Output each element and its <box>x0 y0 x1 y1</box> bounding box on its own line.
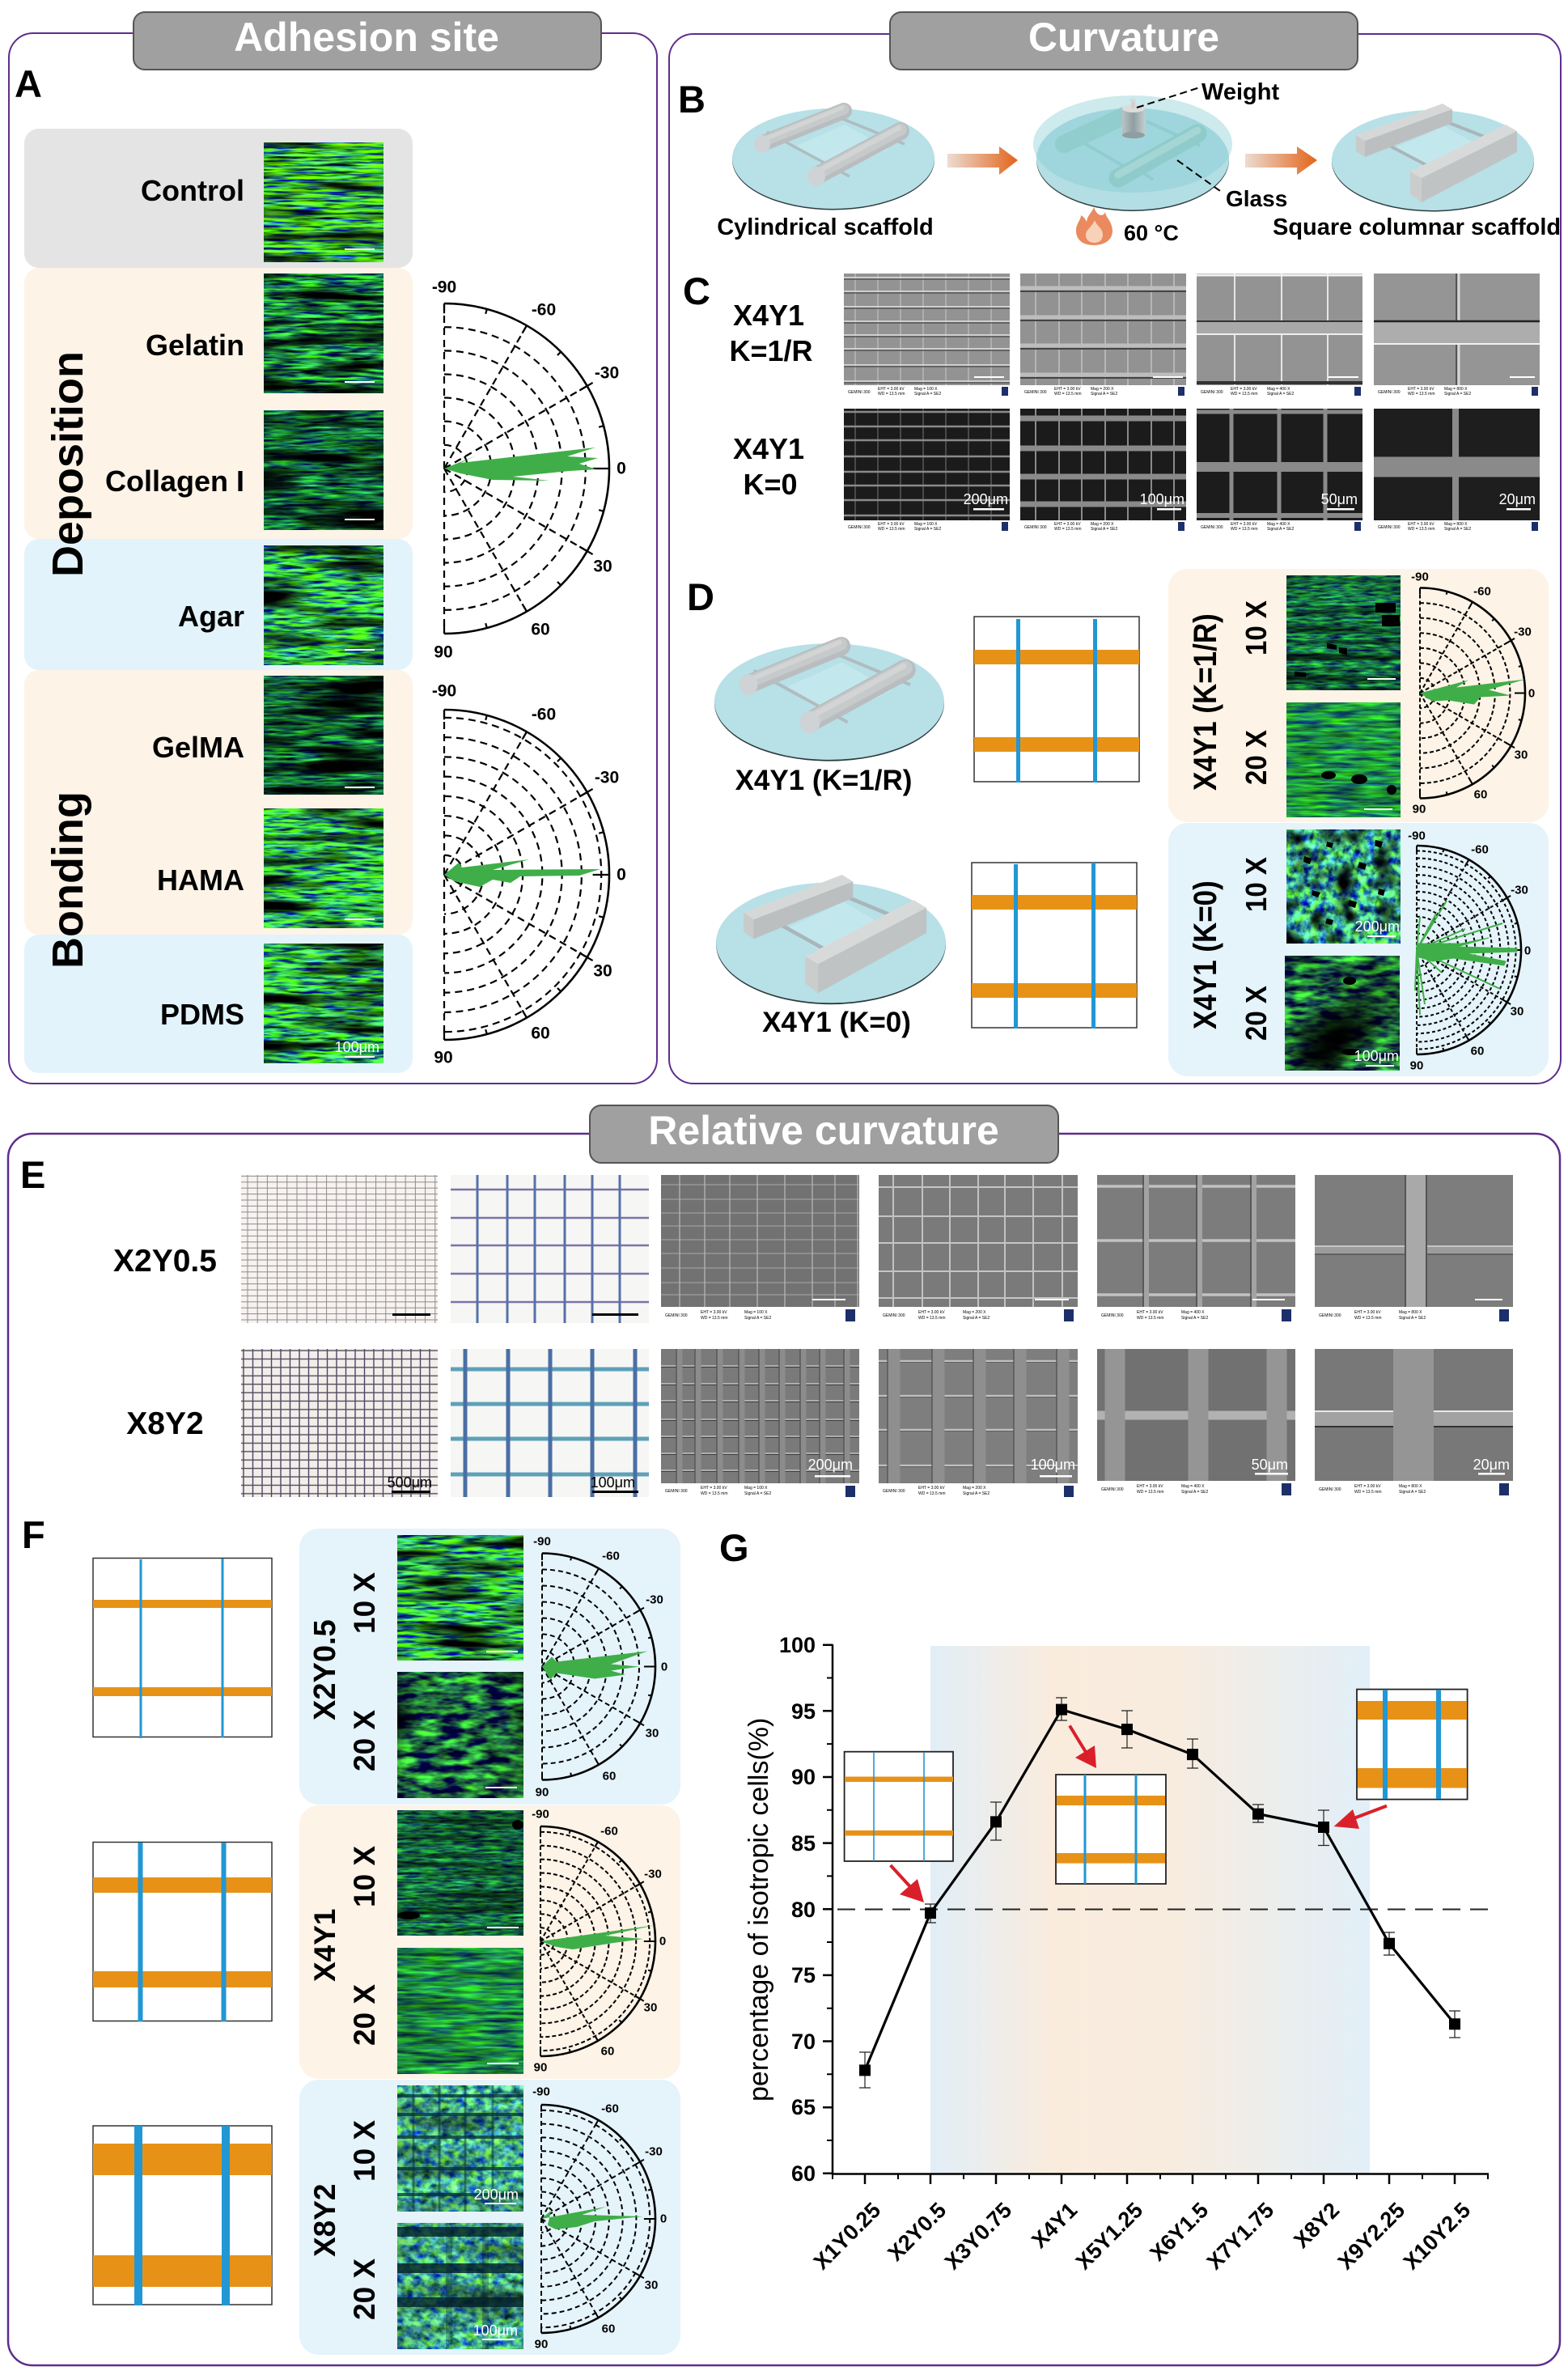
result panel: X4Y1 K=0: 90 <box>1410 1058 1423 1073</box>
result panel: X8Y2: -30 <box>645 2144 663 2159</box>
panel: adhesion site frame <box>9 33 657 1084</box>
SEM K=0 100 um: 100μm <box>1140 491 1184 507</box>
SEM X8Y2 200 um: 200μm <box>808 1457 853 1473</box>
result panel: X2Y0.5: -30 <box>646 1593 663 1607</box>
SEM X2Y0.5 50 um: GEMINI 300 <box>1101 1313 1124 1318</box>
SEM X8Y2 100 um: GEMINI 300 <box>883 1489 905 1494</box>
result panel: X4Y1 K=0: X4Y1 (K=0) <box>1187 880 1223 1029</box>
panel F: schematics and cell alignment <box>22 1513 680 2355</box>
SEM X2Y0.5 100 um <box>879 1175 1078 1323</box>
SEM X8Y2 20 um: 20μm <box>1473 1457 1510 1473</box>
highlighted range band <box>930 1646 1370 2174</box>
polar chart: deposition: -90 <box>432 278 456 296</box>
label D: D <box>687 575 714 618</box>
SEM X2Y0.5 200 um <box>661 1175 859 1323</box>
result panel: X2Y0.5: 30 <box>646 1727 659 1740</box>
result panel: X2Y0.5: 60 <box>603 1769 616 1784</box>
row label: X4Y1 K=1/R: X4Y1 <box>733 299 804 332</box>
disc: cylindrical scaffold <box>732 108 934 210</box>
x axis labels: X5Y1.25 <box>1071 2198 1147 2274</box>
SEM K=1/R 20 um: EHT = 3.00 kV <box>1408 387 1435 392</box>
result panel: X4Y1: 0 <box>659 1934 666 1949</box>
axes and ticks <box>823 1644 1489 2184</box>
schematic: X2Y0.5 <box>93 1559 272 1738</box>
x axis labels: X8Y2 <box>1289 2198 1344 2253</box>
polar chart: deposition: -60 <box>532 301 556 319</box>
row: control: Control <box>141 174 244 207</box>
SEM X2Y0.5 200 um: EHT = 3.00 kV <box>701 1310 727 1315</box>
result panel: X4Y1 <box>299 1805 680 2079</box>
SEM K=0 100 um: Signal A = SE2 <box>1091 527 1117 532</box>
row label: X4Y1 K=1/R <box>729 299 813 367</box>
SEM K=1/R 200 um: WD = 13.5 mm <box>878 392 905 397</box>
SEM K=1/R 20 um: Signal A = SE2 <box>1444 392 1471 397</box>
group: bonding: GelMA <box>152 731 244 764</box>
SEM X8Y2 200 um: WD = 13.5 mm <box>701 1491 727 1496</box>
group: deposition: Collagen I <box>105 464 244 498</box>
SEM K=0 20 um <box>1374 409 1540 532</box>
panel C: SEM images <box>683 269 1540 532</box>
result panel: X4Y1 K=1/R: -60 <box>1473 584 1491 599</box>
caption: X4Y1 K=1/R: X4Y1 (K=1/R) <box>735 765 912 796</box>
data markers <box>859 1704 1460 2076</box>
SEM X8Y2 20 um: Signal A = SE2 <box>1399 1490 1426 1495</box>
result panel: X8Y2: -90 <box>532 2085 550 2099</box>
result panel: X2Y0.5: X2Y0.5 <box>308 1619 342 1720</box>
SEM K=0 200 um: 200μm <box>964 491 1008 507</box>
result panel: X4Y1 K=0: 60 <box>1471 1044 1484 1058</box>
SEM X8Y2 100 um: Mag = 200 X <box>963 1486 985 1491</box>
result panel: X4Y1: 30 <box>644 2000 657 2015</box>
SEM K=0 100 um: Mag = 200 X <box>1091 522 1113 527</box>
SEM X8Y2 20 um: EHT = 3.00 kV <box>1354 1484 1381 1489</box>
heading: adhesion site: Adhesion site <box>234 15 499 60</box>
SEM X8Y2 100 um <box>879 1349 1078 1499</box>
heading: curvature <box>890 12 1358 70</box>
SEM X2Y0.5 50 um: Mag = 400 X <box>1181 1310 1204 1315</box>
SEM K=0 200 um: Signal A = SE2 <box>914 527 941 532</box>
SEM K=0 20 um: EHT = 3.00 kV <box>1408 522 1435 527</box>
result panel: X2Y0.5: 20 X <box>348 1710 381 1771</box>
result panel: X4Y1 K=1/R: 10 X <box>1241 600 1273 655</box>
SEM K=1/R 20 um: Mag = 800 X <box>1444 387 1468 392</box>
error bars <box>859 1698 1460 2088</box>
result panel: X4Y1 K=0: 10 X <box>1241 857 1273 912</box>
SEM X2Y0.5 100 um: WD = 13.5 mm <box>918 1316 945 1321</box>
SEM K=1/R 20 um: WD = 13.5 mm <box>1408 392 1435 397</box>
SEM K=0 50 um: Signal A = SE2 <box>1267 527 1294 532</box>
SEM K=1/R 20 um: GEMINI 300 <box>1378 390 1401 395</box>
disc: X4Y1 K=0 <box>716 875 946 1004</box>
SEM K=1/R 50 um: WD = 13.5 mm <box>1231 392 1257 397</box>
SEM X2Y0.5 200 um: Mag = 100 X <box>744 1310 767 1315</box>
SEM K=0 100 um <box>1020 409 1186 532</box>
SEM K=1/R 100 um: WD = 13.5 mm <box>1054 392 1081 397</box>
polar chart: bonding <box>432 681 626 1067</box>
SEM K=1/R 100 um: EHT = 3.00 kV <box>1054 387 1081 392</box>
SEM X2Y0.5 20 um: WD = 13.5 mm <box>1354 1316 1381 1321</box>
SEM X8Y2 50 um: 50μm <box>1252 1457 1288 1473</box>
group: agar: Agar <box>178 600 244 633</box>
result panel: X4Y1 K=0: 20 X <box>1241 986 1273 1041</box>
panel B: scaffold flattening process <box>678 78 1561 245</box>
chart: percentage of isotropic cells <box>744 1633 1489 2274</box>
SEM K=1/R 100 um: Signal A = SE2 <box>1091 392 1117 397</box>
polar chart: bonding: -90 <box>432 681 456 701</box>
result panel: X4Y1 K=0 <box>1168 823 1549 1076</box>
SEM K=0 20 um: Mag = 800 X <box>1444 522 1468 527</box>
result panel: X8Y2: 60 <box>602 2322 615 2335</box>
result panel: X8Y2: 20 X <box>348 2259 381 2320</box>
polar chart: bonding: 60 <box>531 1024 550 1042</box>
SEM X8Y2 200 um: GEMINI 300 <box>665 1489 688 1494</box>
polar chart: bonding: 90 <box>434 1049 453 1067</box>
heading: adhesion site <box>133 12 601 70</box>
result panel: X2Y0.5: 0 <box>661 1661 667 1673</box>
disc: glass and weight pressing at 60 C <box>1033 95 1232 211</box>
SEM K=0 200 um: Mag = 100 X <box>914 522 937 527</box>
polar chart: bonding: -60 <box>532 706 556 723</box>
leader and label: weight <box>1137 79 1279 108</box>
result panel: X4Y1: 20 X <box>348 1984 381 2046</box>
schematic: X4Y1 K=1/R <box>974 617 1139 783</box>
y axis labels: 70 <box>791 2030 816 2054</box>
x axis labels <box>809 2198 1475 2274</box>
result panel: X2Y0.5: 10 X <box>348 1572 381 1634</box>
result panel: X8Y2: 0 <box>660 2212 667 2225</box>
result panel: X4Y1 K=1/R: 20 X <box>1241 730 1273 785</box>
threshold line at 80 <box>837 1908 1489 1910</box>
heading: curvature: Curvature <box>1028 15 1219 60</box>
row label: X4Y1 K=1/R: K=1/R <box>729 334 813 367</box>
SEM X2Y0.5 200 um: GEMINI 300 <box>665 1313 688 1318</box>
SEM K=1/R 200 um <box>844 274 1010 397</box>
text: temperature: 60 °C <box>1124 221 1179 245</box>
panel E: relative curvature images <box>20 1153 1513 1499</box>
SEM X2Y0.5 50 um: WD = 13.5 mm <box>1137 1316 1163 1321</box>
schematic: X8Y2 <box>93 2126 272 2305</box>
result panel: X4Y1 K=0: -60 <box>1471 843 1489 856</box>
SEM K=0 50 um: 50μm <box>1321 491 1358 507</box>
result panel: X4Y1 K=1/R: 0 <box>1528 686 1535 701</box>
SEM X8Y2 50 um: Signal A = SE2 <box>1181 1490 1208 1495</box>
SEM X8Y2 20 um: WD = 13.5 mm <box>1354 1490 1381 1495</box>
row label: X4Y1 K=0: X4Y1 <box>733 432 804 465</box>
result panel: X2Y0.5: -60 <box>602 1549 620 1563</box>
x axis labels: X9Y2.25 <box>1333 2198 1409 2274</box>
polar chart: deposition <box>432 278 626 662</box>
SEM X8Y2 50 um <box>1097 1349 1295 1497</box>
leader and label: glass: Glass <box>1226 186 1287 211</box>
SEM K=1/R 200 um: GEMINI 300 <box>848 390 871 395</box>
optical X8Y2 low magnification <box>241 1349 438 1497</box>
data line <box>865 1710 1455 2070</box>
SEM X8Y2 100 um: EHT = 3.00 kV <box>918 1486 945 1491</box>
schematic: X4Y1 K=0 <box>972 863 1137 1029</box>
SEM X8Y2 200 um: Signal A = SE2 <box>744 1491 771 1496</box>
panel G: chart of isotropic cells <box>719 1526 1489 2274</box>
SEM K=0 20 um: 20μm <box>1499 491 1536 507</box>
SEM X8Y2 50 um: WD = 13.5 mm <box>1137 1490 1163 1495</box>
red arrow to X4Y1 <box>1070 1725 1096 1768</box>
inset schematic: X2Y0.5 <box>845 1752 953 1861</box>
polar chart: deposition: 60 <box>531 620 550 639</box>
SEM K=0 50 um: GEMINI 300 <box>1201 525 1223 530</box>
SEM X2Y0.5 200 um: Signal A = SE2 <box>744 1316 771 1321</box>
caption: X4Y1 K=0: X4Y1 (K=0) <box>762 1007 911 1038</box>
polar chart: bonding: 30 <box>593 961 612 981</box>
result panel: X4Y1: -30 <box>644 1868 662 1881</box>
result panel: X8Y2: X8Y2 <box>308 2183 341 2257</box>
row label: X4Y1 K=0: K=0 <box>743 468 798 501</box>
SEM X2Y0.5 20 um: Mag = 800 X <box>1399 1310 1422 1315</box>
SEM X2Y0.5 20 um: Signal A = SE2 <box>1399 1316 1426 1321</box>
SEM X2Y0.5 50 um: Signal A = SE2 <box>1181 1316 1208 1321</box>
SEM K=1/R 50 um: GEMINI 300 <box>1201 390 1223 395</box>
SEM X8Y2 200 um: EHT = 3.00 kV <box>701 1486 727 1491</box>
red arrow to X8Y2 <box>1334 1806 1387 1829</box>
SEM X8Y2 50 um: Mag = 400 X <box>1181 1484 1204 1489</box>
SEM X2Y0.5 20 um: GEMINI 300 <box>1319 1313 1341 1318</box>
vertical label: bonding: Bonding <box>44 791 92 969</box>
y axis labels: 75 <box>791 1963 816 1987</box>
SEM K=1/R 20 um <box>1374 274 1540 397</box>
label E: E <box>20 1153 45 1196</box>
result panel: X8Y2: 30 <box>645 2279 658 2292</box>
leader and label: glass <box>1177 160 1287 211</box>
optical X8Y2 high magnification: 100μm <box>591 1474 635 1491</box>
SEM X2Y0.5 100 um: Mag = 200 X <box>963 1310 985 1315</box>
result panel: X4Y1 K=0: 200μm <box>1355 918 1400 935</box>
result panel: X2Y0.5 <box>299 1529 680 1805</box>
label G: G <box>719 1526 749 1569</box>
x axis labels: X2Y0.5 <box>883 2198 951 2266</box>
SEM X2Y0.5 200 um: WD = 13.5 mm <box>701 1316 727 1321</box>
row label: X2Y0.5: X2Y0.5 <box>113 1244 217 1279</box>
result panel: X4Y1: -60 <box>600 1824 618 1839</box>
vertical label: deposition: Deposition <box>44 351 92 577</box>
result panel: X2Y0.5: -90 <box>533 1534 551 1549</box>
result panel: X4Y1 K=1/R: -30 <box>1514 625 1532 639</box>
inset schematic: X8Y2 <box>1357 1690 1468 1800</box>
schematic: X4Y1 <box>93 1842 272 2021</box>
group: deposition <box>24 268 413 539</box>
y axis labels: 100 <box>779 1633 816 1657</box>
group: PDMS: PDMS <box>160 998 244 1031</box>
label C: C <box>683 269 710 312</box>
caption: square columnar scaffold: Square columnar scaffold <box>1273 214 1561 240</box>
y axis labels: 80 <box>791 1898 816 1922</box>
SEM X8Y2 100 um: 100μm <box>1031 1457 1075 1473</box>
label F: F <box>22 1513 45 1556</box>
SEM X8Y2 20 um <box>1315 1349 1513 1497</box>
result panel: X4Y1: 60 <box>601 2044 614 2059</box>
SEM X8Y2 20 um: GEMINI 300 <box>1319 1487 1341 1492</box>
SEM X8Y2 100 um: Signal A = SE2 <box>963 1491 990 1496</box>
SEM K=0 200 um: WD = 13.5 mm <box>878 527 905 532</box>
y axis title: percentage of isotropic cells(%) <box>744 1718 774 2102</box>
polar chart: deposition: 30 <box>593 557 612 576</box>
panel D: curvature comparison <box>687 569 1549 1076</box>
group: deposition: Gelatin <box>146 329 244 362</box>
x axis labels: X6Y1.5 <box>1145 2198 1213 2266</box>
SEM K=1/R 50 um: EHT = 3.00 kV <box>1231 387 1257 392</box>
arrow: process step 2 <box>1245 146 1317 175</box>
y axis labels: 65 <box>791 2095 816 2119</box>
result panel: X4Y1: 10 X <box>348 1846 381 1907</box>
SEM X8Y2 50 um: EHT = 3.00 kV <box>1137 1484 1163 1489</box>
group: PDMS <box>24 935 413 1073</box>
y axis labels <box>779 1633 816 2186</box>
result panel: X4Y1 K=1/R: X4Y1 (K=1/R) <box>1187 613 1223 791</box>
SEM K=0 200 um <box>844 409 1010 532</box>
y axis labels: 90 <box>791 1765 816 1789</box>
x axis labels: X3Y0.75 <box>940 2198 1016 2274</box>
result panel: X4Y1: 90 <box>534 2060 547 2075</box>
SEM K=1/R 50 um <box>1197 274 1362 397</box>
polar chart: deposition: 0 <box>617 460 626 477</box>
row label: X8Y2: X8Y2 <box>126 1406 204 1441</box>
y axis labels: 85 <box>791 1831 816 1856</box>
result panel: X4Y1 K=1/R: 30 <box>1515 748 1528 762</box>
row label: X4Y1 K=0 <box>733 432 804 501</box>
icon: flame <box>1076 207 1112 245</box>
SEM K=1/R 50 um: Mag = 400 X <box>1267 387 1290 392</box>
SEM K=0 100 um: WD = 13.5 mm <box>1054 527 1081 532</box>
result panel: X4Y1 K=0: -30 <box>1511 884 1528 897</box>
disc: X4Y1 K=1/R <box>714 643 944 761</box>
x axis labels: X7Y1.75 <box>1202 2198 1278 2274</box>
SEM K=0 200 um: EHT = 3.00 kV <box>878 522 905 527</box>
SEM K=0 50 um: WD = 13.5 mm <box>1231 527 1257 532</box>
result panel: X4Y1: X4Y1 <box>308 1908 341 1982</box>
SEM K=0 20 um: Signal A = SE2 <box>1444 527 1471 532</box>
y axis labels: 95 <box>791 1699 816 1724</box>
SEM K=0 50 um <box>1197 409 1362 532</box>
result panel: X2Y0.5: 90 <box>536 1785 549 1800</box>
group: PDMS: 100μm <box>335 1039 379 1055</box>
group: agar <box>24 539 413 670</box>
heading: relative curvature <box>590 1105 1058 1163</box>
SEM K=1/R 50 um: Signal A = SE2 <box>1267 392 1294 397</box>
SEM K=0 100 um: GEMINI 300 <box>1024 525 1047 530</box>
x axis labels: X10Y2.5 <box>1399 2198 1475 2274</box>
leader and label: weight: Weight <box>1201 79 1279 105</box>
label A: A <box>15 62 42 105</box>
group: bonding: HAMA <box>157 863 244 897</box>
label B: B <box>678 78 706 121</box>
result panel: X4Y1 K=1/R <box>1168 569 1549 822</box>
result panel: X4Y1 K=0: 30 <box>1511 1005 1524 1018</box>
minor ticks <box>827 1678 1488 2179</box>
SEM X2Y0.5 100 um: GEMINI 300 <box>883 1313 905 1318</box>
panel A: adhesion site <box>15 62 626 1073</box>
inset schematic: X4Y1 <box>1056 1775 1166 1884</box>
optical X8Y2 high magnification <box>451 1349 649 1497</box>
panel: relative curvature frame <box>8 1134 1560 2365</box>
result panel: X8Y2: 90 <box>535 2337 548 2352</box>
row: control <box>24 129 413 268</box>
result panel: X8Y2 <box>299 2080 680 2355</box>
SEM K=1/R 200 um: EHT = 3.00 kV <box>878 387 905 392</box>
optical X2Y0.5 high magnification <box>451 1175 649 1323</box>
polar chart: bonding: -30 <box>595 769 619 787</box>
SEM K=1/R 100 um: Mag = 200 X <box>1091 387 1113 392</box>
SEM X2Y0.5 20 um <box>1315 1175 1513 1323</box>
result panel: X4Y1 K=1/R: 60 <box>1474 788 1487 801</box>
y axis labels: 60 <box>791 2161 816 2186</box>
disc: square columnar scaffold <box>1332 104 1534 212</box>
SEM K=0 50 um: Mag = 400 X <box>1267 522 1290 527</box>
polar chart: deposition: -30 <box>595 364 619 382</box>
SEM X2Y0.5 20 um: EHT = 3.00 kV <box>1354 1310 1381 1315</box>
SEM K=0 20 um: GEMINI 300 <box>1378 525 1401 530</box>
SEM X8Y2 20 um: Mag = 800 X <box>1399 1484 1422 1489</box>
heading: relative curvature: Relative curvature <box>648 1108 999 1153</box>
result panel: X4Y1 K=0: -90 <box>1408 829 1426 843</box>
result panel: X8Y2: 100μm <box>473 2322 518 2339</box>
SEM K=0 20 um: WD = 13.5 mm <box>1408 527 1435 532</box>
SEM K=0 200 um: GEMINI 300 <box>848 525 871 530</box>
polar chart: deposition: 90 <box>434 643 453 662</box>
result panel: X8Y2: 10 X <box>348 2120 381 2182</box>
SEM K=1/R 200 um: Signal A = SE2 <box>914 392 941 397</box>
result panel: X8Y2: -60 <box>601 2102 619 2115</box>
result panel: X4Y1 K=1/R: -90 <box>1411 570 1429 584</box>
result panel: X4Y1: -90 <box>532 1808 549 1821</box>
caption: cylindrical scaffold: Cylindrical scaffold <box>717 214 934 240</box>
arrow: process step 1 <box>947 146 1018 175</box>
SEM K=1/R 100 um <box>1020 274 1186 397</box>
SEM K=1/R 200 um: Mag = 100 X <box>914 387 937 392</box>
SEM K=1/R 100 um: GEMINI 300 <box>1024 390 1047 395</box>
x axis labels: X1Y0.25 <box>809 2198 885 2274</box>
result panel: X4Y1 K=0: 0 <box>1524 944 1531 958</box>
SEM K=0 100 um: EHT = 3.00 kV <box>1054 522 1081 527</box>
SEM X2Y0.5 50 um: EHT = 3.00 kV <box>1137 1310 1163 1315</box>
SEM X8Y2 200 um <box>661 1349 859 1499</box>
red arrow to X2Y0.5 <box>891 1865 924 1902</box>
result panel: X4Y1 K=1/R: 90 <box>1413 803 1426 816</box>
SEM K=0 50 um: EHT = 3.00 kV <box>1231 522 1257 527</box>
group: bonding <box>24 670 413 935</box>
SEM X2Y0.5 100 um: Signal A = SE2 <box>963 1316 990 1321</box>
optical X2Y0.5 low magnification <box>241 1175 438 1323</box>
x axis labels: X4Y1 <box>1027 2198 1082 2253</box>
optical X8Y2 low magnification: 500μm <box>388 1474 432 1491</box>
SEM X2Y0.5 50 um <box>1097 1175 1295 1323</box>
SEM X2Y0.5 100 um: EHT = 3.00 kV <box>918 1310 945 1315</box>
result panel: X8Y2: 200μm <box>474 2186 519 2203</box>
panel: curvature frame <box>669 34 1561 1084</box>
polar chart: bonding: 0 <box>617 866 626 884</box>
SEM X8Y2 100 um: WD = 13.5 mm <box>918 1491 945 1496</box>
SEM X8Y2 50 um: GEMINI 300 <box>1101 1487 1124 1492</box>
SEM X8Y2 200 um: Mag = 100 X <box>744 1486 767 1491</box>
result panel: X4Y1 K=0: 100μm <box>1354 1048 1399 1064</box>
